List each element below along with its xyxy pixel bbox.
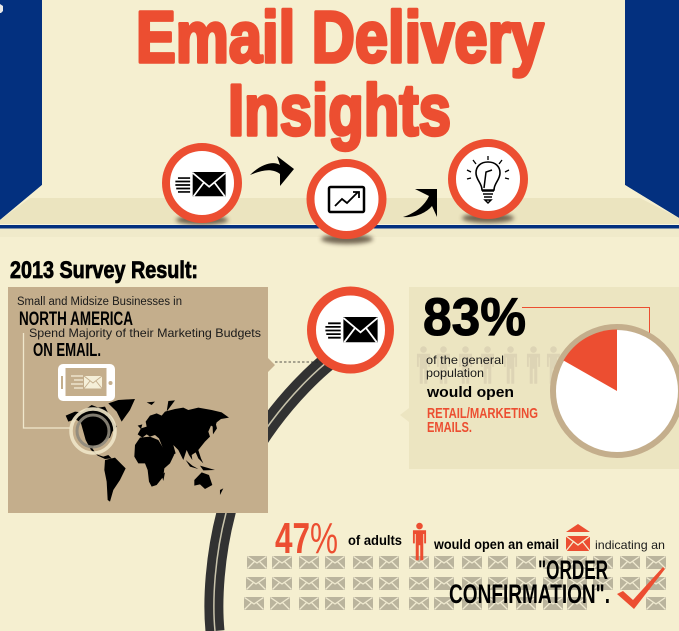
title (136, 0, 544, 151)
text: order confirmation: CONFIRMATION". (449, 579, 610, 609)
road (214, 358, 332, 631)
text: of the general population: population (426, 366, 484, 380)
icon: red check mark (617, 567, 665, 609)
text: of the general population (426, 353, 504, 380)
heading: survey result: 2013 Survey Result: (10, 257, 198, 284)
text: on email: ON EMAIL. (33, 340, 101, 360)
people row (417, 346, 560, 384)
title: Insights (228, 71, 451, 151)
stat: 47%: 47% (275, 514, 338, 563)
text: of adults: of adults (348, 532, 402, 548)
icon: light bulb circle in header (452, 143, 524, 223)
envelope grid (244, 556, 666, 610)
text: indicating an: indicating an (595, 538, 665, 552)
callout line (522, 307, 650, 335)
arrow: chart to bulb (403, 189, 437, 217)
arrow: email to chart (250, 156, 294, 186)
location rings (71, 409, 115, 453)
text: of the general population: of the general (426, 353, 504, 367)
icon: phone (58, 364, 115, 401)
panel: north america (8, 287, 275, 513)
title: Email Delivery (136, 0, 544, 78)
pie chart (553, 327, 679, 455)
dashed connector (275, 361, 325, 363)
text: order confirmation: "ORDER (538, 555, 608, 585)
icon: red envelope (566, 524, 590, 551)
text: would open an email: would open an email (433, 536, 559, 552)
icon: red person (413, 523, 426, 560)
text: retail marketing emails: RETAIL/MARKETING (427, 405, 538, 422)
icon: email circle on road (312, 291, 390, 369)
connector line (24, 333, 70, 428)
world map (66, 399, 229, 502)
corner cursor mark (0, 4, 3, 13)
stage header backdrop (0, 0, 679, 237)
text: north america: NORTH AMERICA (19, 309, 133, 330)
icon: email circle in header (166, 147, 238, 225)
text: retail marketing emails: EMAILS. (427, 419, 472, 436)
text: spend majority: Spend Majority of their Marketing Budgets (29, 326, 261, 340)
text: order confirmation (449, 555, 610, 609)
text: retail marketing emails (427, 405, 538, 436)
stat: 83%: 83% (423, 288, 526, 347)
text: small and midsize: Small and Midsize Businesses in (17, 296, 182, 308)
text: would open: would open (426, 384, 514, 401)
icon: chart circle in header (310, 163, 382, 244)
panel: 83 percent (400, 287, 679, 469)
